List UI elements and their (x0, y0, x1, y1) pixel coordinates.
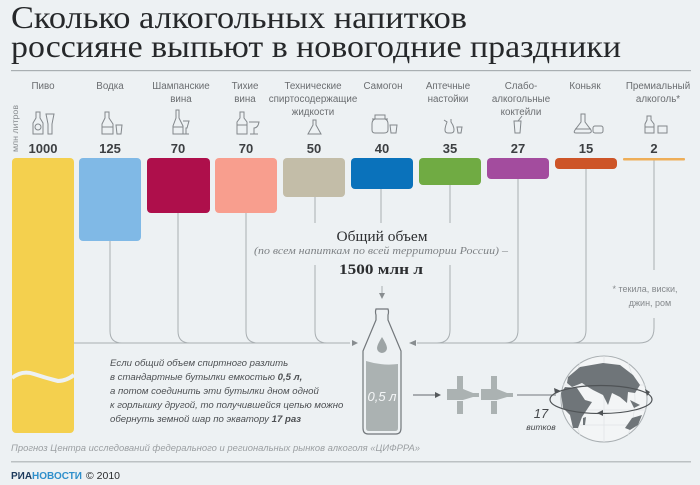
category labels: жидкости (292, 107, 334, 118)
bar: technical liquids (283, 158, 345, 197)
category labels: спиртосодержащие (269, 94, 358, 105)
bar: beer (12, 158, 74, 433)
icon: samogon (372, 115, 397, 133)
values: 35 (443, 141, 457, 156)
category labels: Премиальный (626, 81, 690, 92)
category labels: Самогон (363, 81, 403, 92)
category labels: Технические (284, 81, 342, 92)
total volume callout (254, 229, 509, 278)
bottles chain (447, 376, 513, 414)
arrow to bottle (379, 286, 385, 299)
total volume callout: Общий объем (336, 229, 428, 245)
values: 125 (99, 141, 121, 156)
title (11, 0, 621, 64)
category labels: Пиво (31, 81, 55, 92)
bar: still wine (215, 158, 277, 213)
category labels: настойки (428, 94, 468, 105)
icon: vodka (102, 112, 122, 134)
values (29, 141, 658, 156)
icon: premium (645, 116, 667, 133)
premium footnote: * текила, виски, (612, 284, 678, 294)
logo and copyright (11, 470, 120, 482)
description text: к горлышку другой, то получившейся цепью можно (110, 400, 344, 411)
values: 2 (650, 141, 658, 156)
bar: tinctures (419, 158, 481, 185)
bar: samogon (351, 158, 413, 189)
icon: technical (308, 120, 321, 134)
bottle: 0,5 л (367, 389, 397, 404)
values: 1000 (29, 141, 57, 156)
category labels: Аптечные (426, 81, 471, 92)
premium footnote (612, 284, 678, 308)
logo and copyright: © 2010 (86, 470, 120, 482)
values: 70 (239, 141, 253, 156)
description text: а потом соединить эти бутылки дном одной (110, 386, 319, 397)
arrows into bottle (352, 340, 416, 346)
globe (561, 356, 647, 442)
values: 70 (171, 141, 185, 156)
17 turns label (526, 406, 556, 432)
title: Сколько алкогольных напитков (11, 0, 467, 35)
values: 15 (579, 141, 593, 156)
title: россияне выпьют в новогодние праздники (11, 28, 621, 64)
category labels (31, 81, 690, 118)
orbit rings (550, 386, 652, 416)
17 turns label: 17 (534, 406, 549, 421)
category labels: Шампанские (152, 81, 210, 92)
line to globe (517, 394, 556, 396)
category labels: Слабо- (505, 81, 537, 92)
bar: premium alcohol (623, 158, 685, 160)
values: 27 (511, 141, 525, 156)
category labels: Водка (96, 81, 124, 92)
premium footnote: джин, ром (629, 298, 671, 308)
axis unit label: млн литров (11, 105, 20, 152)
icon: still wine (237, 112, 259, 134)
category labels: вина (170, 94, 192, 105)
icon: tinctures (444, 119, 462, 133)
icon: cocktail (514, 116, 522, 133)
description text (110, 358, 344, 425)
bar: champagne (147, 158, 210, 213)
logo and copyright: РИАНОВОСТИ (11, 470, 82, 482)
icon: champagne (173, 110, 189, 134)
description text: в стандартные бутылки емкостью 0,5 л, (110, 372, 302, 383)
values: 50 (307, 141, 321, 156)
connector lines (74, 160, 654, 343)
arrow to bottle chain (413, 392, 441, 398)
bar: vodka (79, 158, 141, 241)
icon: cognac (574, 114, 603, 133)
17 turns label: витков (526, 422, 556, 432)
category labels: коктейли (501, 107, 541, 118)
category labels: вина (234, 94, 256, 105)
category labels: Коньяк (569, 81, 601, 92)
source: Прогноз Центра исследований федерального и региональных рынков алкоголя «ЦИФРРА» (11, 443, 420, 453)
category labels: Тихие (232, 81, 259, 92)
bottle (363, 309, 401, 434)
description text: обернуть земной шар по экватору 17 раз (110, 414, 301, 425)
icon: beer (33, 112, 54, 134)
total volume callout: (по всем напиткам по всей территории России) – (254, 245, 509, 257)
bar: cognac (555, 158, 617, 169)
category labels: алкоголь* (636, 94, 680, 105)
description text: Если общий объем спиртного разлить (110, 358, 288, 369)
values: 40 (375, 141, 389, 156)
bar: low-alcohol cocktails (487, 158, 549, 179)
total volume callout: 1500 млн л (339, 262, 424, 278)
category labels: алкогольные (492, 94, 551, 105)
